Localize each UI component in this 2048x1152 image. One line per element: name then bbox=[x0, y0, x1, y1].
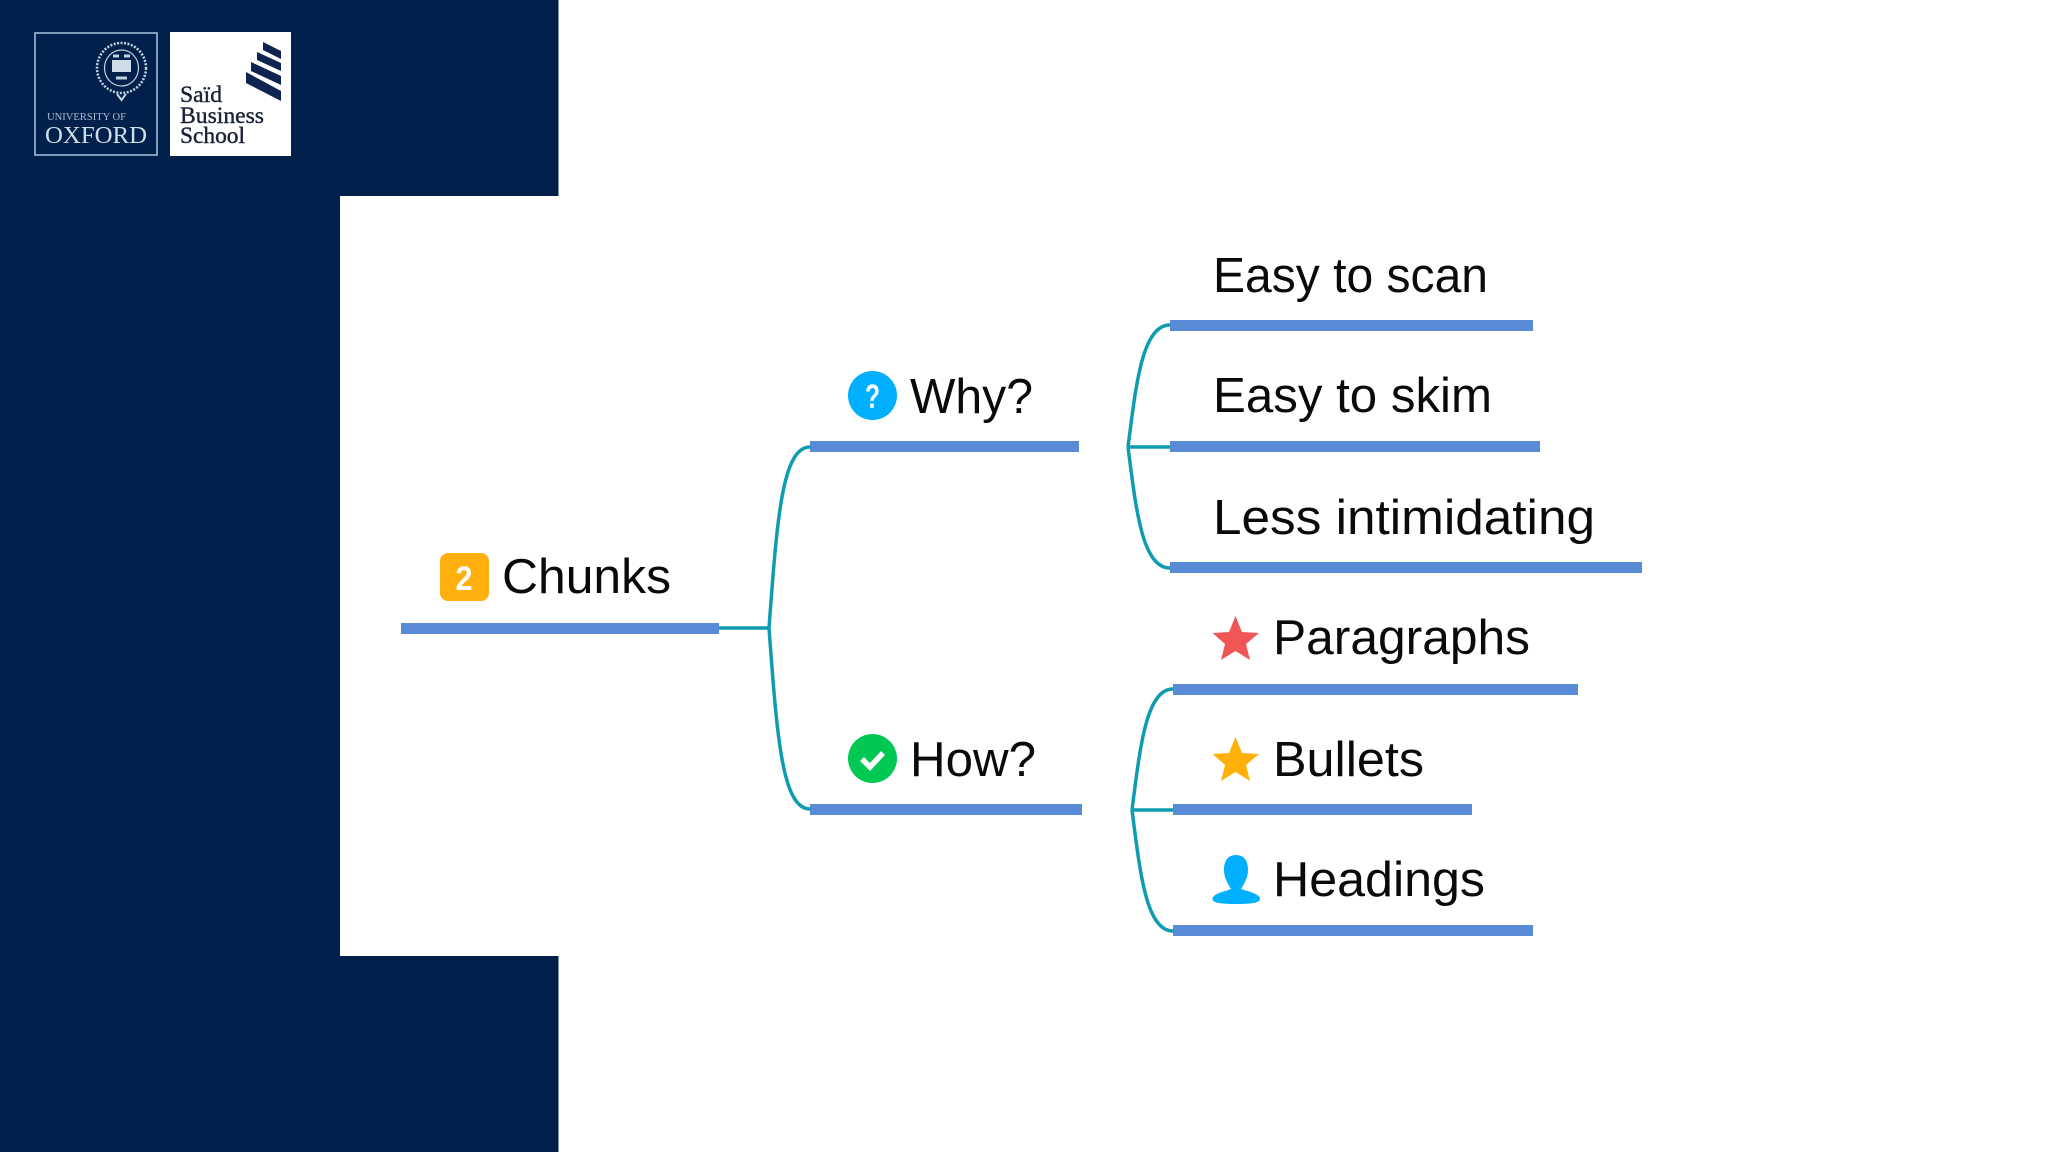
item: Easy to skim: Easy to skim bbox=[1213, 369, 1492, 423]
icon: person bbox=[1212, 855, 1260, 904]
item: Easy to scan bbox=[1170, 249, 1533, 331]
underline: Easy to scan bbox=[1170, 320, 1533, 331]
node: Why? bbox=[810, 370, 1079, 452]
underline: Bullets bbox=[1173, 804, 1472, 815]
underline: Headings bbox=[1173, 925, 1533, 936]
label: Why?: Why? bbox=[910, 370, 1033, 424]
logo text: Said: Saïd bbox=[180, 82, 223, 107]
node: How? bbox=[810, 733, 1082, 815]
item: Less intimidating: Less intimidating bbox=[1213, 491, 1595, 545]
item: Headings bbox=[1173, 853, 1533, 936]
label: How?: How? bbox=[910, 733, 1036, 787]
connector: How to its items bbox=[1132, 689, 1173, 931]
icon: Said stripes bbox=[246, 42, 281, 101]
underline: Less intimidating bbox=[1170, 562, 1642, 573]
item: Bullets bbox=[1173, 733, 1472, 815]
logo text: Oxford: OXFORD bbox=[45, 123, 147, 149]
icon: check mark bbox=[848, 734, 897, 783]
item: Paragraphs bbox=[1173, 611, 1578, 695]
underline: How? bbox=[810, 804, 1082, 815]
label: Chunks: Chunks bbox=[502, 550, 671, 604]
node: Chunks bbox=[401, 550, 719, 634]
label: Bullets: Bullets bbox=[1273, 733, 1424, 787]
label: Headings: Headings bbox=[1273, 853, 1485, 907]
logo text: Business: Business bbox=[180, 103, 264, 128]
item: Easy to scan: Easy to scan bbox=[1213, 249, 1488, 303]
icon: question mark bbox=[848, 371, 897, 420]
logo text: University of: UNIVERSITY OF bbox=[47, 112, 126, 123]
underline: Chunks bbox=[401, 623, 719, 634]
icon: red star bbox=[1212, 616, 1259, 660]
connector: Chunks to Why and How bbox=[719, 447, 810, 809]
label: Paragraphs: Paragraphs bbox=[1273, 611, 1530, 665]
logo: Said Business School bbox=[170, 32, 291, 156]
icon: priority 2 badge: 2 bbox=[456, 560, 472, 598]
icon: question mark: ? bbox=[865, 378, 880, 416]
item: Easy to skim bbox=[1170, 369, 1540, 452]
underline: Paragraphs bbox=[1173, 684, 1578, 695]
item: Less intimidating bbox=[1170, 491, 1642, 573]
icon: Oxford crest bbox=[97, 43, 146, 100]
navy side panel bbox=[0, 0, 558, 1152]
logo text: School: School bbox=[180, 123, 245, 148]
icon: orange star bbox=[1212, 737, 1259, 781]
icon: priority 2 badge bbox=[440, 553, 489, 601]
logo: University of Oxford bbox=[35, 33, 157, 155]
underline: Why? bbox=[810, 441, 1079, 452]
connector: Why to its items bbox=[1128, 325, 1170, 568]
underline: Easy to skim bbox=[1170, 441, 1540, 452]
